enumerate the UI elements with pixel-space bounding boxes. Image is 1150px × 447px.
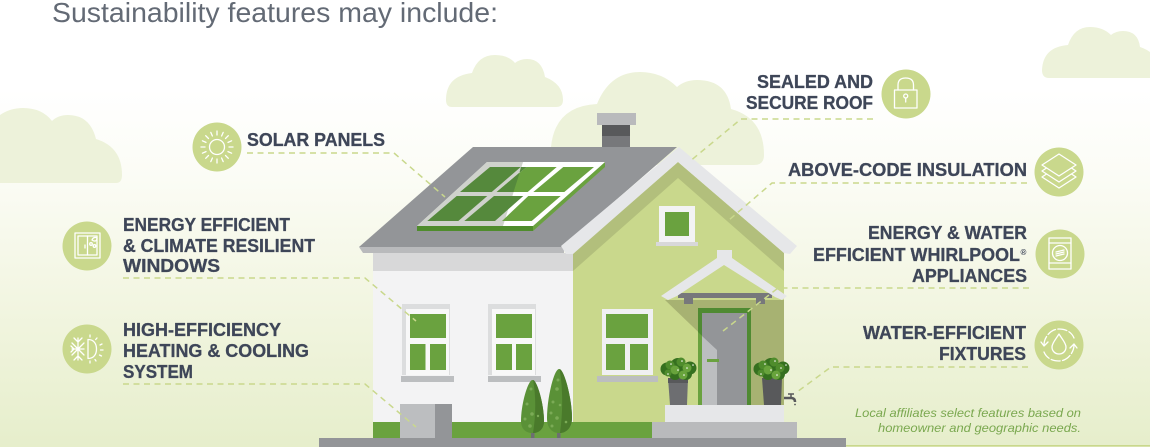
ground strip — [319, 438, 846, 447]
label: windows: ENERGY EFFICIENT — [123, 214, 291, 235]
planter left — [660, 358, 696, 405]
heat pump unit — [400, 404, 452, 438]
tree 1 — [521, 380, 544, 438]
label: appliances — [813, 222, 1027, 286]
cloud: upper centre — [446, 55, 563, 107]
bottom rule — [846, 445, 1150, 446]
label: windows: WINDOWS — [123, 255, 220, 276]
steps — [652, 405, 797, 438]
icon: washing machine — [1036, 230, 1084, 278]
label: heating and cooling: SYSTEM — [123, 361, 193, 382]
porch shadow — [665, 300, 784, 405]
porch gable — [677, 265, 774, 297]
label: heating and cooling — [123, 319, 309, 382]
label: windows: & CLIMATE RESILIENT — [123, 235, 316, 256]
icon: sun — [192, 122, 242, 172]
planter right — [754, 358, 790, 405]
cloud: left — [0, 108, 122, 183]
green gable wall — [573, 162, 784, 438]
icon: window — [62, 222, 112, 270]
roof eave — [359, 247, 564, 253]
footnote: Local affiliates select features based on — [855, 406, 1081, 420]
label: insulation: ABOVE-CODE INSULATION — [788, 159, 1027, 180]
icon: heating and cooling — [62, 324, 112, 374]
icon: insulation layers — [1034, 148, 1084, 196]
door — [698, 308, 751, 405]
label: fixtures: FIXTURES — [939, 343, 1026, 364]
label: heating and cooling: HIGH-EFFICIENCY — [123, 319, 282, 340]
label: roof: SECURE ROOF — [746, 92, 873, 113]
icon: water cycle — [1034, 320, 1084, 370]
solar panels — [417, 162, 605, 231]
roof — [359, 147, 677, 247]
label: roof — [746, 71, 873, 113]
icon: padlock — [882, 70, 930, 118]
label: roof: SEALED AND — [757, 71, 873, 92]
porch roof trim — [661, 250, 787, 300]
cloud: behind house — [551, 72, 764, 165]
gable shadow band — [573, 162, 784, 271]
label: fixtures: WATER-EFFICIENT — [863, 322, 1027, 343]
lawn — [373, 422, 652, 438]
white wall — [373, 253, 573, 438]
footnote — [855, 406, 1081, 435]
porch beam — [678, 293, 772, 304]
label: appliances: APPLIANCES — [912, 265, 1027, 286]
window 1 — [401, 304, 454, 382]
window 3 — [597, 309, 658, 382]
house — [319, 113, 846, 447]
footnote: homeowner and geographic needs. — [878, 421, 1081, 435]
attic window — [656, 206, 698, 246]
wall eave shadow — [373, 253, 573, 271]
label: appliances: EFFICIENT WHIRLPOOL — [813, 244, 1020, 265]
label: windows — [123, 214, 316, 276]
label: solar panels: SOLAR PANELS — [247, 129, 385, 150]
cloud: top right — [1042, 27, 1150, 78]
label: appliances: ENERGY & WATER — [868, 222, 1027, 243]
faucet — [784, 394, 796, 405]
chimney — [597, 113, 636, 147]
clouds — [0, 27, 1150, 183]
tree 2 — [547, 369, 572, 438]
label: fixtures — [863, 322, 1027, 364]
label: heating and cooling: HEATING & COOLING — [123, 340, 309, 361]
window 2 — [488, 304, 541, 382]
leader lines — [123, 119, 1029, 427]
label: appliances: ® — [1020, 248, 1026, 257]
gable white trim — [561, 147, 797, 254]
